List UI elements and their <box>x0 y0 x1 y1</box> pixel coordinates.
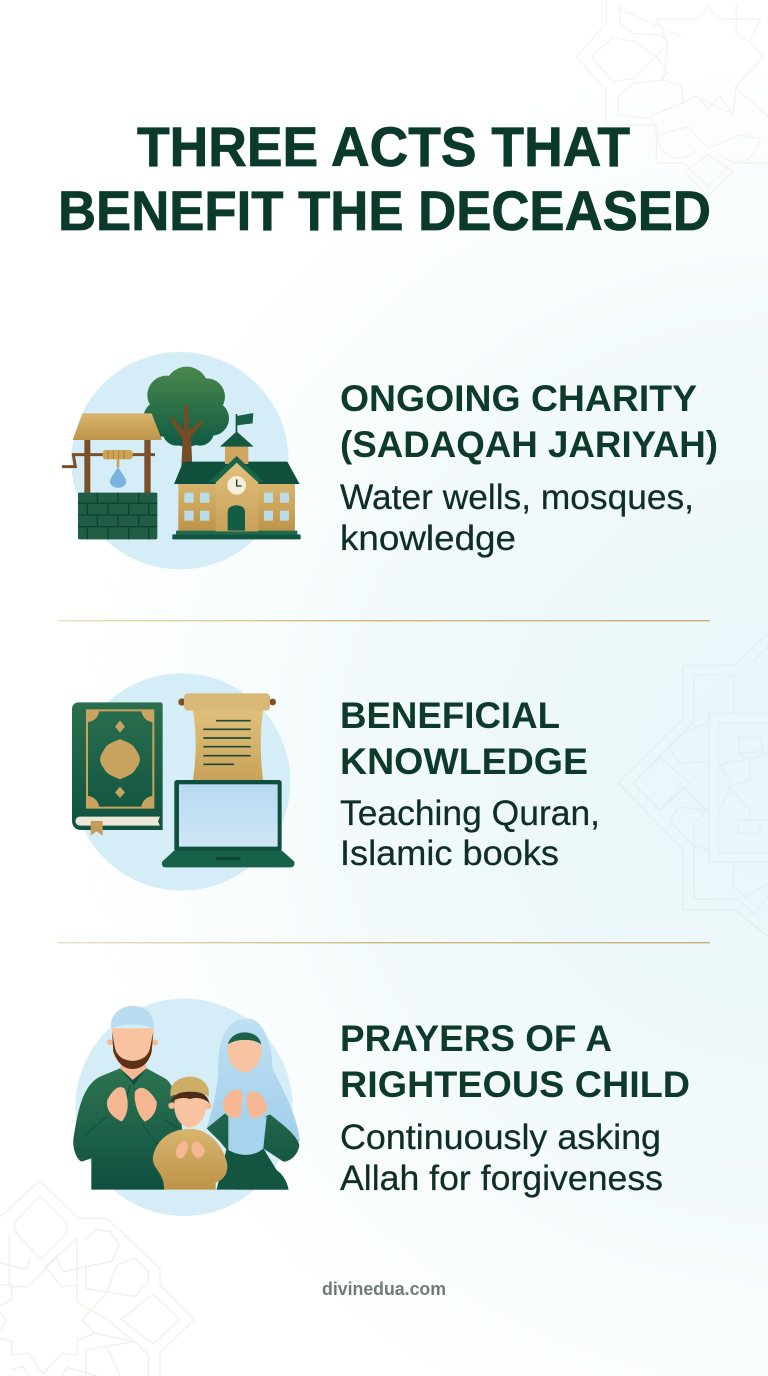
description <box>340 1118 663 1198</box>
heading: ONGOING CHARITY <box>340 377 697 419</box>
description: Teaching Quran, <box>340 794 600 833</box>
decorative pattern: bottom left <box>0 1181 194 1376</box>
icon: family praying <box>73 999 300 1216</box>
description: Water wells, mosques, <box>340 478 694 517</box>
description: Continuously asking <box>340 1118 661 1157</box>
icon: book, scroll and laptop <box>72 673 294 891</box>
heading: RIGHTEOUS CHILD <box>340 1063 690 1105</box>
panel: ongoing charity <box>62 352 718 569</box>
title: THREE ACTS THAT <box>137 115 630 178</box>
description <box>340 478 694 558</box>
icon: well, tree and school <box>62 352 301 569</box>
title <box>58 115 711 242</box>
description: Allah for forgiveness <box>340 1159 663 1198</box>
heading: BENEFICIAL <box>340 694 560 736</box>
heading: KNOWLEDGE <box>340 740 588 782</box>
panel: prayers of a righteous child <box>73 999 690 1216</box>
footer website: divinedua.com <box>322 1278 446 1299</box>
description: Islamic books <box>340 834 559 873</box>
description <box>340 794 600 873</box>
heading: PRAYERS OF A <box>340 1017 612 1059</box>
heading <box>340 694 588 782</box>
heading <box>340 377 718 465</box>
heading <box>340 1017 690 1105</box>
title: BENEFIT THE DECEASED <box>58 179 711 242</box>
heading: (SADAQAH JARIYAH) <box>340 423 718 465</box>
description: knowledge <box>340 519 516 558</box>
panel: beneficial knowledge <box>72 673 600 891</box>
decorative pattern: top right <box>576 0 768 197</box>
decorative pattern: right middle <box>618 633 768 937</box>
